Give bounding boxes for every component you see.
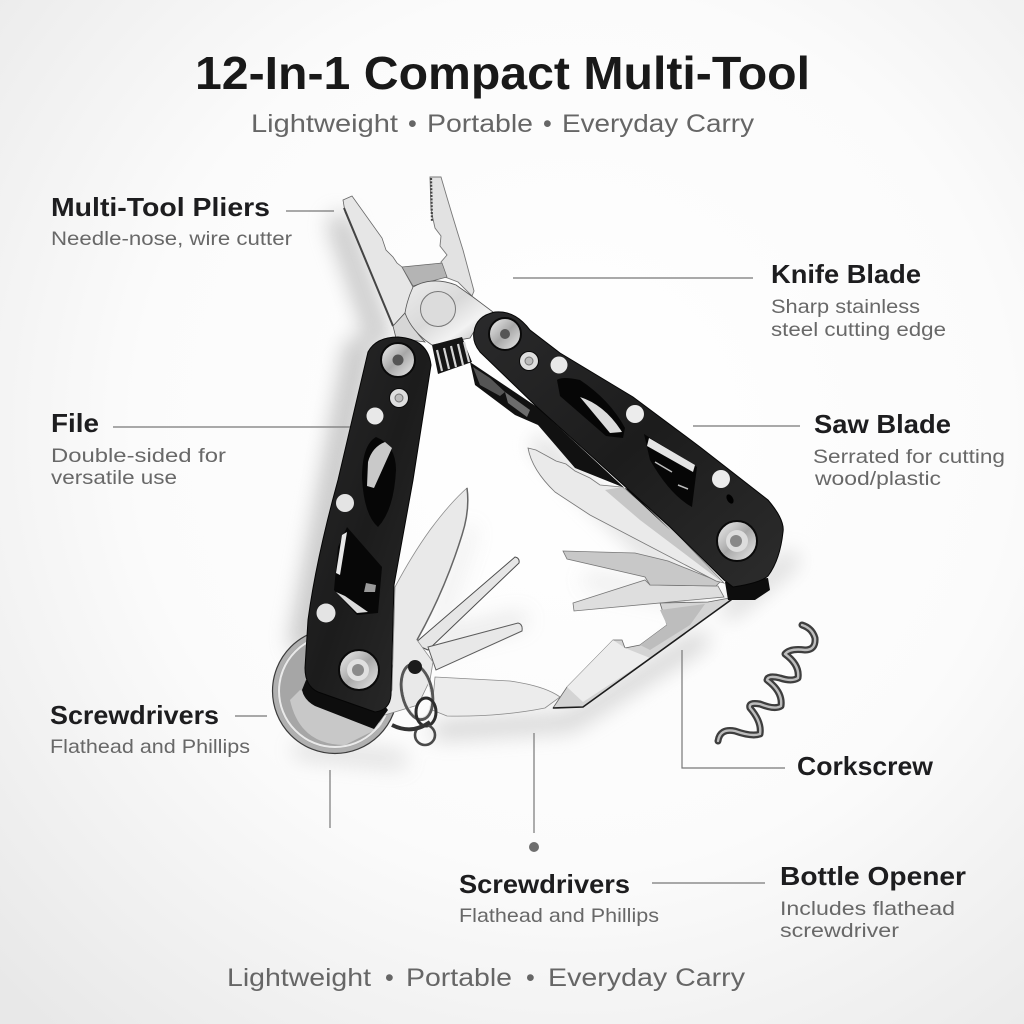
pivot disc — [420, 292, 456, 326]
pivot body — [393, 313, 425, 342]
handle screw top — [381, 343, 415, 377]
left jaw — [343, 196, 413, 326]
callout: multi-tool pliers: Needle-nose, wire cutter — [51, 228, 293, 250]
left fan tools — [378, 488, 560, 717]
tool: flat bar one — [414, 557, 519, 650]
spring — [432, 337, 472, 374]
corkscrew — [718, 625, 815, 741]
flat blade upper — [563, 551, 720, 586]
jaw cradle — [402, 263, 447, 286]
callout: screwdrivers left — [50, 700, 330, 828]
callout: bottle opener: Includes flathead — [780, 898, 955, 920]
callout: screwdrivers left: Flathead and Phillips — [50, 736, 250, 758]
callout: corkscrew — [682, 650, 934, 781]
bottom tagline: • — [526, 964, 535, 992]
flat blade lower — [573, 580, 724, 611]
white dot — [366, 408, 384, 424]
bottom tagline: Everyday Carry — [548, 964, 746, 992]
back handle with saw teeth — [470, 362, 670, 530]
tool: spear blade — [432, 677, 560, 716]
jaws and pivot — [343, 177, 493, 345]
subtitle: Portable — [427, 110, 533, 138]
multi-tool illustration — [272, 177, 815, 760]
callout: saw blade: Saw Blade — [814, 409, 951, 439]
callout: knife blade: Sharp stainless — [771, 296, 920, 318]
callout: bottle opener — [652, 861, 966, 942]
callout: saw blade: wood/plastic — [814, 468, 941, 490]
subtitle: Lightweight — [251, 110, 398, 138]
white dot — [316, 604, 336, 622]
subtitle: • — [408, 110, 417, 138]
white dot — [626, 405, 644, 423]
callout: saw blade — [693, 409, 1005, 490]
callout: bottle opener: Bottle Opener — [780, 861, 966, 891]
callout: bottle opener: screwdriver — [780, 920, 900, 942]
tool: flat bar two — [428, 623, 522, 670]
left handle — [302, 337, 431, 729]
tiny hole — [725, 493, 735, 505]
callout: file: versatile use — [51, 467, 177, 489]
callout: knife blade: steel cutting edge — [771, 319, 946, 341]
bottom tagline: Lightweight — [227, 964, 371, 992]
right jaw — [430, 177, 474, 296]
back inner cutouts — [473, 367, 530, 417]
lower cutout — [334, 527, 382, 615]
ring rivet — [390, 388, 408, 408]
window cutout — [644, 434, 697, 507]
handle screw bottom — [717, 521, 757, 561]
callout: screwdrivers left: Screwdrivers — [50, 700, 219, 730]
key ring — [272, 628, 398, 754]
callout: screwdrivers center — [459, 733, 659, 927]
serrated saw blade — [528, 448, 724, 583]
white dot — [336, 494, 354, 512]
title: 12-In-1 Compact Multi-Tool — [195, 47, 810, 99]
handle screw bottom — [339, 650, 379, 690]
callout: screwdrivers center: Flathead and Phillips — [459, 905, 659, 927]
tool: large knife blade — [378, 488, 468, 717]
callout: saw blade: Serrated for cutting — [813, 446, 1005, 468]
bottom tagline: Portable — [406, 964, 512, 992]
oval cutout — [362, 437, 396, 527]
callout: multi-tool pliers — [51, 192, 334, 250]
split rings chain — [392, 660, 437, 745]
soft shadows — [300, 225, 790, 760]
callout: corkscrew: Corkscrew — [797, 751, 934, 781]
bottle opener — [553, 597, 735, 708]
right handle — [474, 312, 783, 600]
callout: file — [51, 408, 350, 489]
callout: knife blade: Knife Blade — [771, 259, 921, 289]
callout: multi-tool pliers: Multi-Tool Pliers — [51, 192, 270, 222]
callout: knife blade — [513, 259, 946, 341]
subtitle: • — [543, 110, 552, 138]
callout: file: Double-sided for — [51, 445, 227, 467]
white dot — [712, 470, 730, 488]
ring rivet — [520, 352, 538, 370]
bottom tagline — [227, 964, 746, 992]
callout: screwdrivers center: Screwdrivers — [459, 869, 630, 899]
right side tools — [528, 448, 735, 708]
white dot — [550, 356, 568, 374]
callout: file: File — [51, 408, 99, 438]
subtitle: Everyday Carry — [562, 110, 755, 138]
lens cutout — [557, 378, 625, 438]
bottom tagline: • — [385, 964, 394, 992]
handle screw top — [489, 318, 521, 350]
subtitle — [251, 110, 755, 138]
